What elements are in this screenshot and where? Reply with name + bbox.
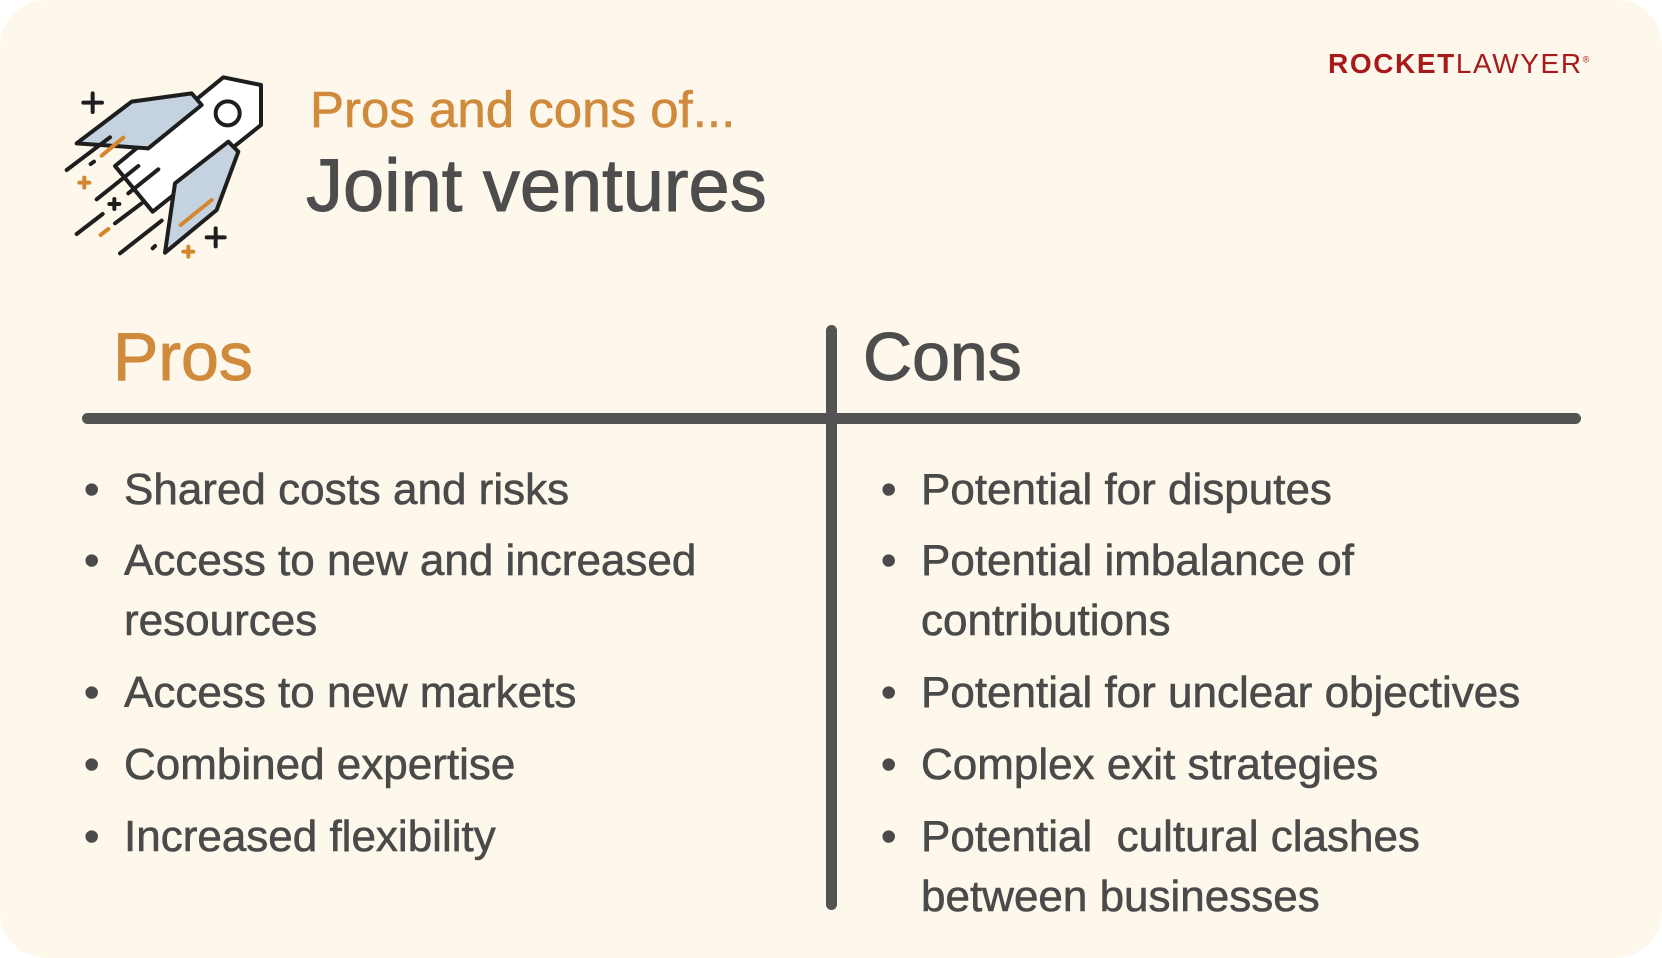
heading: cons: Cons [863, 319, 1022, 395]
divider vertical [826, 325, 837, 910]
con item 4: Complex exit strategies [921, 740, 1378, 789]
subtitle: Pros and cons of... [310, 81, 735, 138]
pro item 3: Access to new markets [124, 668, 576, 717]
list: cons: • [881, 465, 896, 514]
list: pros: • [84, 668, 99, 717]
list: pros: • [84, 465, 99, 514]
con item 2: contributions [921, 596, 1170, 645]
logo: ROCKETLAWYER® [1328, 48, 1591, 79]
pro item 2: Access to new and increased [124, 536, 696, 585]
list: pros: • [84, 812, 99, 861]
list: cons [881, 465, 1520, 921]
list: cons: • [881, 812, 896, 861]
con item 2 [881, 536, 1354, 645]
pro item 2: resources [124, 596, 317, 645]
con item 5: between businesses [921, 872, 1320, 921]
list: pros: • [84, 740, 99, 789]
list: cons: • [881, 740, 896, 789]
list: pros: • [84, 536, 99, 585]
con item 1: Potential for disputes [921, 465, 1332, 514]
list: cons: • [881, 536, 896, 585]
heading: pros: Pros [113, 319, 253, 395]
list: pros [84, 465, 696, 861]
icon: rocket [64, 75, 263, 259]
con item 2: Potential imbalance of [921, 536, 1354, 585]
con item 5 [881, 812, 1420, 921]
pro item 5: Increased flexibility [124, 812, 496, 861]
list: cons: • [881, 668, 896, 717]
con item 3: Potential for unclear objectives [921, 668, 1520, 717]
pro item 4: Combined expertise [124, 740, 515, 789]
con item 5: Potential cultural clashes [921, 812, 1420, 861]
divider horizontal [82, 413, 1581, 424]
pro item 1: Shared costs and risks [124, 465, 569, 514]
pro item 2 [84, 536, 696, 645]
title: Joint ventures [306, 144, 767, 227]
